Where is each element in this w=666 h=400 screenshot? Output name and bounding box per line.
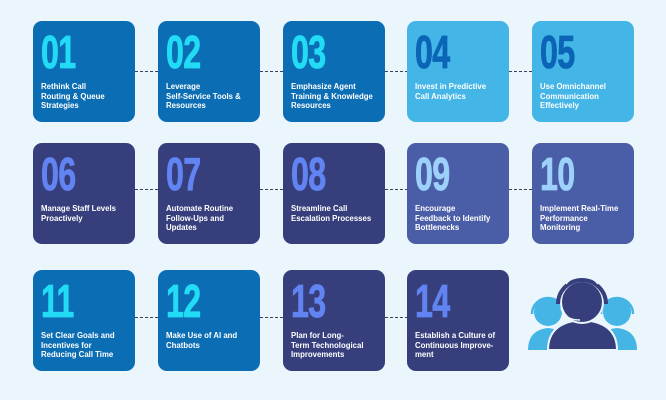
card 03: 03 (291, 26, 325, 78)
card 13: 13 (291, 275, 325, 327)
card 05: Use Omnichannel (540, 82, 606, 91)
card 07: 07 (166, 148, 200, 200)
card 02: Leverage (166, 82, 200, 91)
card 08: 08 (291, 148, 325, 200)
card 07: Updates (166, 223, 197, 232)
card 06 (33, 143, 135, 244)
card 14 (407, 270, 509, 371)
card 02: 02 (166, 26, 200, 78)
card 10 (532, 143, 634, 244)
card 13 (283, 270, 385, 371)
card 01: 01 (41, 26, 75, 78)
card 03: Training & Knowledge (291, 92, 373, 101)
card 11 (33, 270, 135, 371)
card 04: 04 (415, 26, 449, 78)
card 05 (532, 21, 634, 122)
card 09: Bottlenecks (415, 223, 459, 232)
card 10: 10 (540, 148, 574, 200)
card 04 (407, 21, 509, 122)
icon: call center agents (528, 278, 637, 350)
card 05: Communication (540, 92, 599, 101)
card 05: 05 (540, 26, 574, 78)
card 08: Streamline Call (291, 204, 347, 213)
card 08: Escalation Processes (291, 214, 371, 223)
card 12: 12 (166, 275, 200, 327)
card 01: Rethink Call (41, 82, 86, 91)
card 01 (33, 21, 135, 122)
card 14: Establish a Culture of (415, 331, 495, 340)
card 09: Encourage (415, 204, 455, 213)
card 02 (158, 21, 260, 122)
card 12: Chatbots (166, 341, 200, 350)
card 04: Call Analytics (415, 92, 466, 101)
card 09: Feedback to Identify (415, 214, 490, 223)
card 11: Reducing Call Time (41, 350, 113, 359)
card 13: Improvements (291, 350, 344, 359)
card 14: 14 (415, 275, 449, 327)
card 13: Term Technological (291, 341, 364, 350)
card 11: Set Clear Goals and (41, 331, 115, 340)
card 14: Continuous Improve- (415, 341, 493, 350)
card 07 (158, 143, 260, 244)
card 04: Invest in Predictive (415, 82, 486, 91)
card 05: Effectively (540, 101, 579, 110)
card 02: Resources (166, 101, 206, 110)
card 03 (283, 21, 385, 122)
card 06: Manage Staff Levels (41, 204, 116, 213)
card 09: 09 (415, 148, 449, 200)
card 14: ment (415, 350, 434, 359)
card 13: Plan for Long- (291, 331, 344, 340)
card 02: Self-Service Tools & (166, 92, 241, 101)
card 01: Routing & Queue (41, 92, 105, 101)
card 09 (407, 143, 509, 244)
card 01: Strategies (41, 101, 79, 110)
dashed connectors (135, 21, 637, 371)
card 12 (158, 270, 260, 371)
card 10: Implement Real-Time (540, 204, 618, 213)
card 07: Automate Routine (166, 204, 233, 213)
card 03: Emphasize Agent (291, 82, 356, 91)
card 03: Resources (291, 101, 331, 110)
card 11: Incentives for (41, 341, 92, 350)
card 10: Performance (540, 214, 588, 223)
card 07: Follow-Ups and (166, 214, 224, 223)
card 06: 06 (41, 148, 75, 200)
card 10: Monitoring (540, 223, 580, 232)
card 11: 11 (41, 275, 74, 327)
card 08 (283, 143, 385, 244)
card 12: Make Use of AI and (166, 331, 237, 340)
card 06: Proactively (41, 214, 83, 223)
